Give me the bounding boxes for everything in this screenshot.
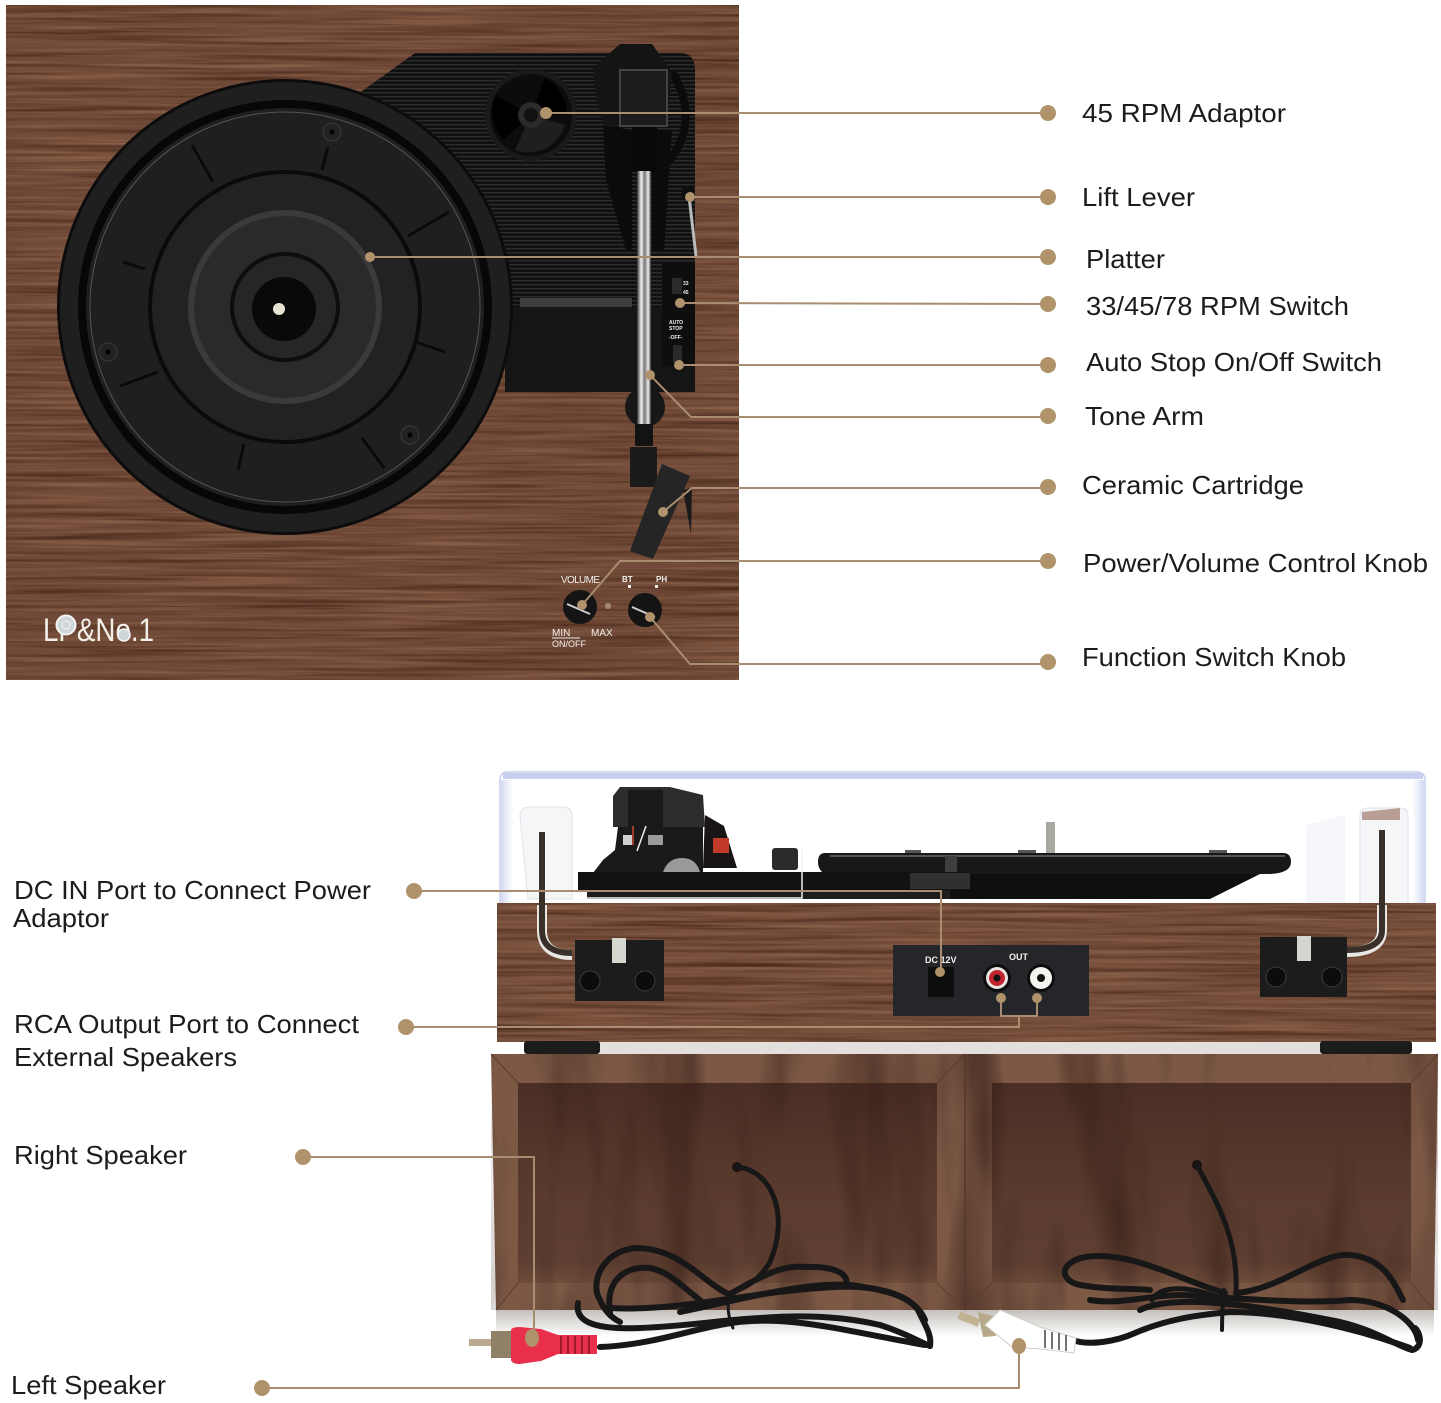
cartridge side view [593, 787, 798, 873]
callout: Ceramic Cartridge: Ceramic Cartridge [1082, 470, 1304, 500]
right speaker cable [959, 1165, 1420, 1353]
callout: Left Speaker [11, 1338, 1026, 1400]
white RCA plug [959, 1310, 1076, 1353]
volume knob: MIN [552, 628, 570, 639]
speaker right box [965, 1054, 1438, 1310]
callout: Right Speaker [14, 1140, 539, 1347]
speed and auto stop switch labels: -OFF- [669, 335, 683, 341]
function knob: BT [622, 575, 633, 584]
left speaker cable [469, 1167, 930, 1364]
speed and auto stop switch labels [669, 278, 689, 363]
speed and auto stop switch labels: AUTO [669, 320, 683, 326]
callout: Platter [365, 244, 1165, 274]
callout: Power/Volume Control Knob: Power/Volume Control Knob [1083, 548, 1428, 578]
callout: Tone Arm: Tone Arm [1085, 401, 1204, 431]
volume knob [552, 575, 613, 649]
platter [57, 79, 513, 535]
speed and auto stop switch labels: 45 [683, 290, 689, 296]
left hinge and handle [542, 832, 664, 1001]
callout: DC IN Port: Adaptor [13, 903, 109, 933]
callout: RCA Output Port [14, 993, 1042, 1072]
callout: Ceramic Cartridge [658, 470, 1304, 517]
platter side view [818, 822, 1291, 899]
red RCA plug [469, 1327, 597, 1364]
callout: Lift Lever [685, 182, 1195, 212]
port panel: OUT [1009, 952, 1028, 962]
callout: RCA Output Port: External Speakers [14, 1042, 237, 1072]
volume knob: MAX [591, 628, 613, 639]
volume knob: ON/OFF [552, 639, 586, 649]
speed and auto stop switch labels: STOP [669, 326, 683, 332]
lift lever [682, 186, 696, 256]
brand logo: LP&No.1 [43, 612, 154, 648]
callout: RPM Switch: 33/45/78 RPM Switch [1086, 291, 1349, 321]
tone arm [593, 44, 692, 559]
callout: Tone Arm [645, 370, 1204, 431]
speed and auto stop switch labels: 33 [683, 281, 689, 287]
volume knob: VOLUME [561, 575, 600, 586]
wood base [497, 903, 1436, 1042]
port panel [893, 945, 1089, 1016]
callout: 45 RPM Adaptor [540, 98, 1286, 128]
wood top panel [6, 5, 739, 680]
right hinge and handle [1260, 830, 1382, 997]
speaker left box [491, 1054, 965, 1310]
callout: Function Switch Knob: Function Switch Knob [1082, 642, 1346, 672]
plinth side view [578, 850, 970, 899]
callout: Auto Stop Switch [674, 347, 1382, 377]
function knob [622, 575, 667, 627]
port panel: DC 12V [925, 955, 957, 965]
callout: Power/Volume Control Knob [577, 548, 1428, 610]
indicator light [605, 603, 611, 609]
callout: Right Speaker: Right Speaker [14, 1140, 187, 1170]
callout: Lift Lever: Lift Lever [1082, 182, 1195, 212]
function knob: PH [656, 575, 667, 584]
callout: DC IN Port: DC IN Port to Connect Power [14, 875, 371, 905]
feet [524, 1041, 1412, 1054]
callout: Left Speaker: Left Speaker [11, 1370, 166, 1400]
callout: RCA Output Port: RCA Output Port to Connect [14, 1009, 360, 1039]
dust cover [500, 772, 1425, 905]
callout: DC IN Port [13, 875, 945, 977]
turntable back view [469, 772, 1438, 1364]
callout: 45 RPM Adaptor: 45 RPM Adaptor [1082, 98, 1286, 128]
callout: Function Switch Knob [645, 612, 1346, 672]
turntable top view [6, 5, 739, 680]
black tonearm plinth [340, 53, 695, 392]
45 RPM adaptor [485, 69, 577, 161]
callout: RPM Switch [675, 291, 1349, 321]
floor shadow [496, 1310, 1434, 1336]
callout: Platter: Platter [1086, 244, 1165, 274]
callout: Auto Stop Switch: Auto Stop On/Off Switch [1086, 347, 1382, 377]
